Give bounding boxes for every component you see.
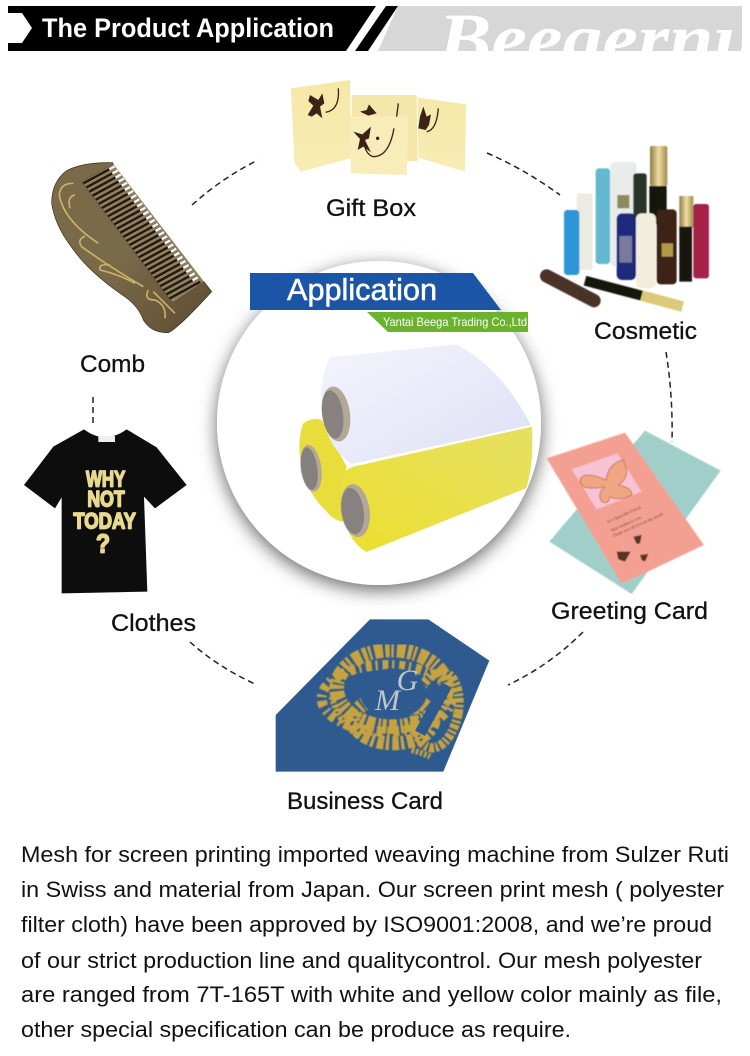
front roll core — [337, 482, 373, 539]
header title: The Product Application — [42, 13, 334, 43]
gold wreath ornament — [322, 650, 465, 757]
banner heading: Application — [287, 272, 437, 307]
label: comb: Comb — [80, 351, 145, 378]
label: cosmetic: Cosmetic — [594, 318, 697, 345]
icon: black t-shirt — [24, 429, 187, 593]
header black ribbon — [8, 6, 376, 51]
script ribbon — [420, 685, 447, 733]
company name: Yantai Beega Trading Co.,Ltd — [383, 315, 527, 329]
description paragraph — [21, 842, 729, 1042]
white circle — [217, 261, 541, 585]
blue application banner — [250, 273, 501, 310]
mesh rolls — [297, 344, 532, 552]
white roll core — [318, 385, 354, 443]
header watermark band — [378, 6, 742, 51]
monogram: M — [374, 684, 402, 717]
header slash accent — [355, 6, 398, 51]
inner monogram panel — [360, 668, 427, 718]
back roll core — [297, 443, 325, 493]
icon: greeting card: To a Specially Friend — [606, 504, 642, 524]
icon: gift box bags — [291, 80, 466, 175]
description paragraph: other special specification can be produce as require. — [21, 1017, 571, 1042]
dashed connector ring — [93, 153, 672, 685]
monogram: G — [397, 664, 419, 697]
description paragraph: of our strict production line and qualitycontrol. Our mesh polyester — [21, 948, 702, 973]
back yellow roll — [299, 419, 347, 522]
icon: greeting card — [547, 431, 721, 594]
green company ribbon — [367, 312, 528, 332]
monogram — [374, 664, 419, 717]
icon: black t-shirt: ? — [96, 529, 110, 559]
description paragraph: are ranged from 7T-165T with white and yellow color mainly as file, — [21, 982, 722, 1007]
icon: business card — [276, 619, 489, 772]
label: greeting card: Greeting Card — [551, 598, 708, 625]
icon: greeting card: Thank you all love in the world — [612, 511, 664, 538]
front yellow roll — [341, 427, 532, 552]
icon: wooden comb — [52, 163, 212, 333]
icon: black t-shirt: TODAY — [73, 508, 136, 533]
label: gift box: Gift Box — [326, 195, 416, 222]
white roll — [321, 344, 531, 464]
icon: black t-shirt: WHY — [86, 467, 126, 492]
label: business card: Business Card — [287, 788, 443, 815]
header bar — [8, 6, 742, 51]
header watermark band: Beegernu — [437, 0, 750, 79]
label: clothes: Clothes — [111, 610, 196, 637]
central circle with rolls — [217, 261, 541, 585]
description paragraph: filter cloth) have been approved by ISO9001:2008, and we’re proud — [21, 912, 712, 937]
description paragraph: in Swiss and material from Japan. Our screen print mesh ( polyester — [21, 877, 724, 902]
icon: black t-shirt: NOT — [87, 487, 125, 512]
icon: greeting card: Best wishes to you — [610, 514, 643, 533]
icon: cosmetic bottles — [547, 146, 709, 307]
description paragraph: Mesh for screen printing imported weaving machine from Sulzer Ruti — [21, 842, 729, 867]
